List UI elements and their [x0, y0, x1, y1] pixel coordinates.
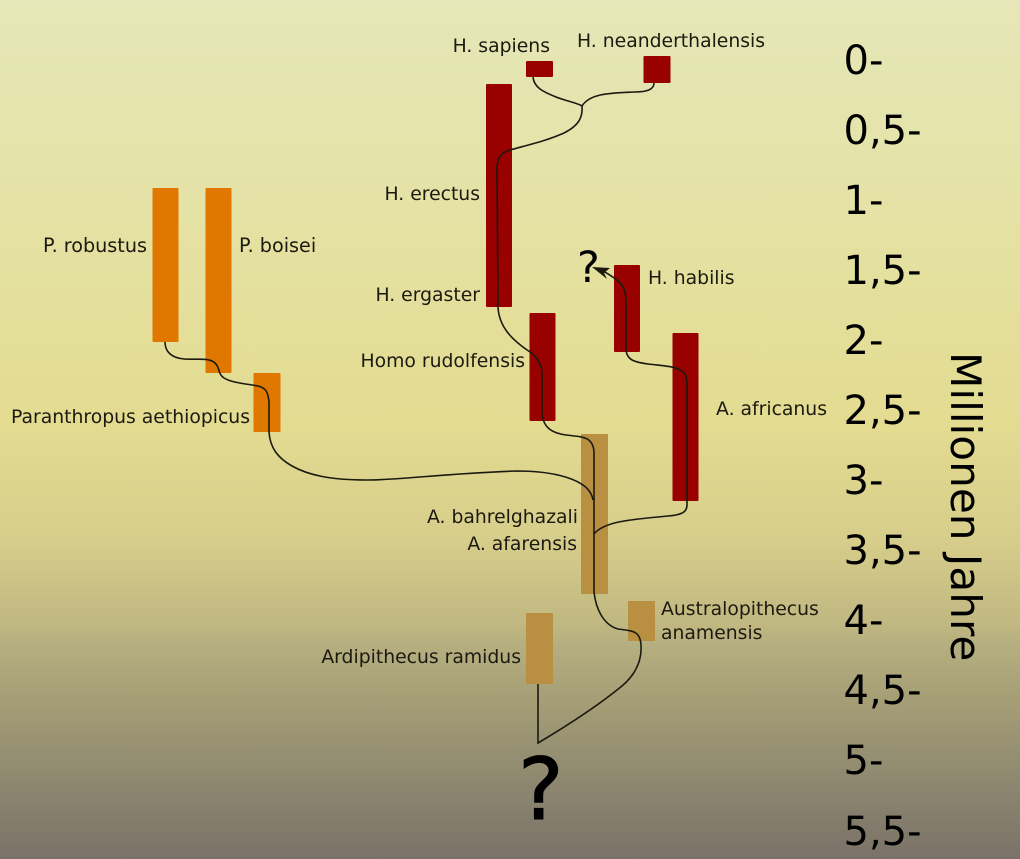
line: H. neanderthalensis branch [582, 83, 654, 106]
label: Australopithecus anamensis: Australopithecus [661, 599, 819, 620]
time axis scale: 5,5- [844, 809, 922, 855]
bar: H. neanderthalensis [644, 56, 670, 83]
icon: small question mark: ? [577, 243, 600, 293]
line: H. sapiens branch [533, 77, 582, 106]
label: H. habilis: H. habilis [648, 268, 735, 289]
label: H. neanderthalensis: H. neanderthalensis [577, 31, 765, 52]
time axis scale: 1- [844, 178, 883, 224]
bar: Australopithecus anamensis [628, 601, 655, 641]
label: H. sapiens: H. sapiens [453, 36, 550, 57]
bar: H. erectus and H. ergaster [486, 84, 512, 307]
label: A. africanus: A. africanus [716, 399, 827, 420]
bar: A. africanus [672, 333, 698, 501]
bar: A. afarensis and A. bahrelghazali [581, 434, 608, 594]
icon: large question mark: ? [518, 740, 564, 840]
label: P. robustus: P. robustus [43, 234, 147, 257]
arrow: H. habilis to question mark [592, 267, 687, 534]
bar: P. boisei [206, 188, 232, 373]
label: Ardipithecus ramidus: Ardipithecus ramidus [321, 647, 521, 668]
time axis scale: 3- [844, 458, 883, 504]
label: P. boisei: P. boisei [239, 234, 316, 257]
time axis scale: 0,5- [844, 108, 922, 154]
axis title: Millionen Jahre [941, 352, 990, 661]
time axis scale: 4,5- [844, 668, 922, 714]
line: Homo erectus to A. afarensis lineage [497, 106, 641, 743]
group: Homo and A. africanus bars [486, 56, 698, 501]
time axis scale: 2- [844, 318, 883, 364]
line: Paranthropus lineage [165, 342, 593, 500]
time axis scale: 4- [844, 598, 883, 644]
time axis scale: 2,5- [844, 388, 922, 434]
bar: Homo rudolfensis [530, 313, 556, 421]
group: early hominin bars [526, 434, 655, 684]
bar: P. robustus [152, 188, 178, 342]
group: Paranthropus bars [152, 188, 280, 432]
label: A. afarensis: A. afarensis [467, 534, 577, 555]
time axis scale: 3,5- [844, 528, 922, 574]
label: Homo rudolfensis: Homo rudolfensis [361, 351, 525, 372]
bar: H. sapiens [526, 61, 553, 77]
label: Paranthropus aethiopicus: Paranthropus aethiopicus [11, 407, 250, 428]
time axis scale: 5- [844, 738, 883, 784]
bar: Paranthropus aethiopicus [254, 373, 280, 432]
time axis scale: 1,5- [844, 248, 922, 294]
species labels [11, 31, 827, 668]
group: lineage connector lines [165, 77, 687, 743]
label: H. erectus: H. erectus [384, 184, 480, 205]
label: H. ergaster: H. ergaster [375, 285, 480, 306]
time axis scale [844, 38, 922, 855]
label: Australopithecus anamensis: anamensis [661, 623, 762, 644]
time axis scale: 0- [844, 38, 883, 84]
bar: H. habilis [614, 265, 640, 352]
bar: Ardipithecus ramidus [526, 613, 553, 684]
label: A. bahrelghazali: A. bahrelghazali [427, 507, 578, 528]
